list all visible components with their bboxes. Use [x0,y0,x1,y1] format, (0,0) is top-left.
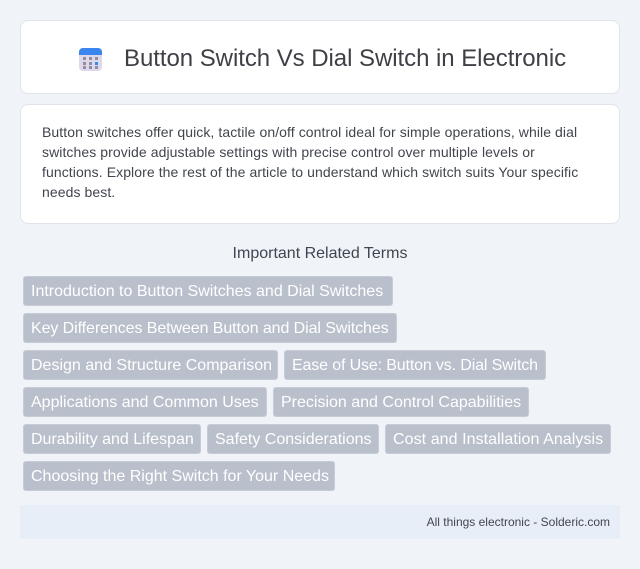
icon: calendar keypad [79,48,102,71]
summary card [20,104,620,224]
tag 2: Key Differences Between Button and Dial Switches [31,320,389,337]
tag 5: Applications and Common Uses [31,394,259,411]
tag 5 [23,387,267,417]
tag 10: Choosing the Right Switch for Your Needs [31,468,329,485]
tag 10 [23,461,335,491]
footer bar [20,505,620,539]
tag 1 [23,276,393,306]
tag 3: Design and Structure Comparison [31,357,272,374]
tag 8: Safety Considerations [215,431,372,448]
header card [20,20,620,94]
related terms tags [23,276,611,491]
tag 4 [284,350,546,380]
tag 9 [385,424,611,454]
tag 6: Precision and Control Capabilities [281,394,521,411]
summary text: Button switches offer quick, tactile on/off control ideal for simple operations, while dial [42,124,577,140]
heading: important related terms: Important Related Terms [233,245,407,262]
tag 2 [23,313,397,343]
summary text: needs best. [42,184,115,200]
tag 1: Introduction to Button Switches and Dial Switches [31,283,383,300]
summary text [42,124,578,200]
tag 9: Cost and Installation Analysis [393,431,603,448]
summary text: switches provide adjustable settings with precise control over multiple levels or [42,144,535,160]
footer credit: All things electronic - Solderic.com [427,515,610,529]
tag 3 [23,350,278,380]
summary text: functions. Explore the rest of the article to understand which switch suits Your specific [42,164,578,180]
title: Button Switch Vs Dial Switch in Electronic [124,45,566,72]
tag 4: Ease of Use: Button vs. Dial Switch [292,357,538,374]
tag 6 [273,387,529,417]
tag 8 [207,424,379,454]
tag 7: Durability and Lifespan [31,431,194,448]
tag 7 [23,424,201,454]
